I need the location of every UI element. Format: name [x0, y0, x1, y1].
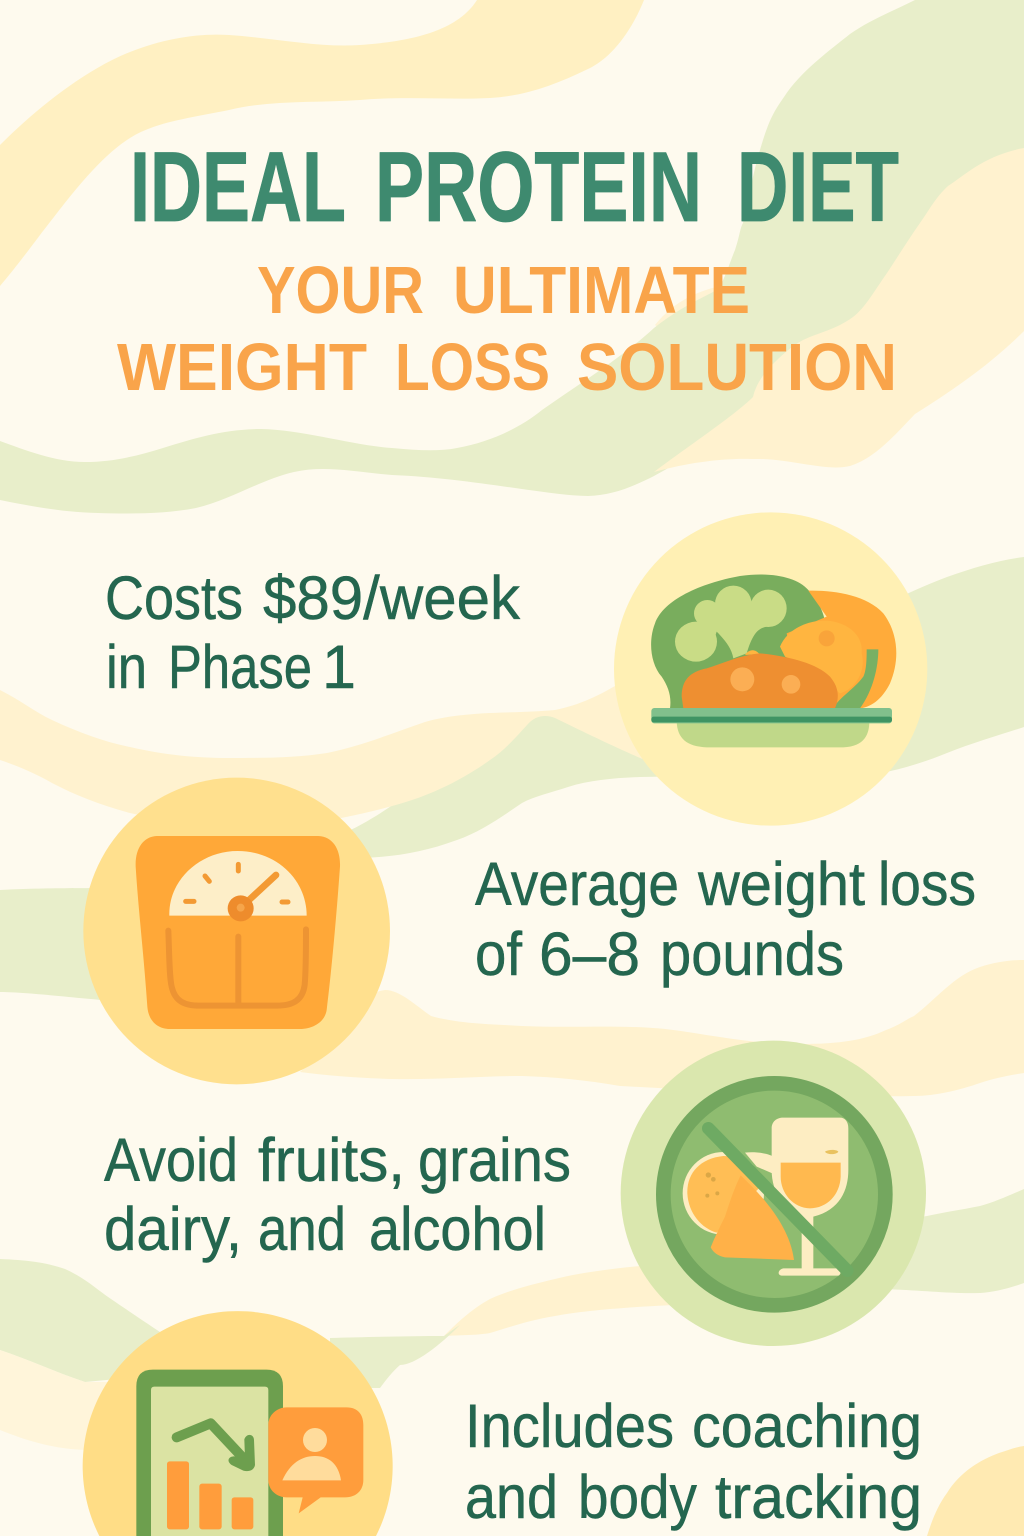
text: cost: $89/week	[263, 564, 520, 632]
text: foods to avoid: grains	[418, 1126, 571, 1194]
text: coaching: tracking	[715, 1463, 922, 1531]
icon: prohibited foods	[621, 1041, 926, 1346]
text: foods to avoid	[104, 1126, 571, 1263]
subtitle: ULTIMATE	[453, 253, 750, 328]
text: weight loss	[475, 850, 976, 988]
text: cost: Costs	[105, 564, 243, 632]
text: weight loss: weight	[697, 850, 865, 918]
text: foods to avoid: and	[258, 1195, 346, 1263]
text: weight loss: 6–8	[539, 920, 640, 988]
title: IDEAL	[130, 131, 346, 242]
icon: weighing scale	[83, 778, 390, 1084]
title	[130, 131, 899, 242]
text: foods to avoid: dairy,	[104, 1195, 242, 1263]
subtitle: WEIGHT	[117, 330, 367, 405]
text: foods to avoid: fruits,	[258, 1126, 405, 1194]
subtitle	[117, 253, 897, 405]
text: cost	[105, 564, 520, 701]
text: coaching: and	[465, 1463, 558, 1531]
text: foods to avoid: alcohol	[369, 1195, 546, 1263]
text: cost: 1	[322, 633, 356, 701]
text: foods to avoid: Avoid	[104, 1126, 238, 1194]
icon: plate of food	[614, 512, 927, 826]
text: weight loss: Average	[475, 850, 679, 918]
text: weight loss: pounds	[660, 920, 844, 988]
subtitle: YOUR	[257, 253, 424, 328]
text: cost: in	[106, 633, 147, 701]
subtitle: LOSS	[395, 330, 550, 405]
text: cost: Phase	[168, 633, 312, 701]
text: coaching: Includes	[465, 1392, 674, 1460]
text: weight loss: of	[475, 920, 523, 988]
icon: phone tracking and coach	[83, 1311, 393, 1536]
text: coaching: coaching	[692, 1392, 922, 1460]
text: coaching: body	[578, 1463, 697, 1531]
title: PROTEIN	[375, 131, 702, 242]
subtitle: SOLUTION	[577, 330, 897, 405]
text: weight loss: loss	[878, 850, 976, 918]
text: coaching	[465, 1392, 922, 1531]
title: DIET	[737, 131, 899, 242]
